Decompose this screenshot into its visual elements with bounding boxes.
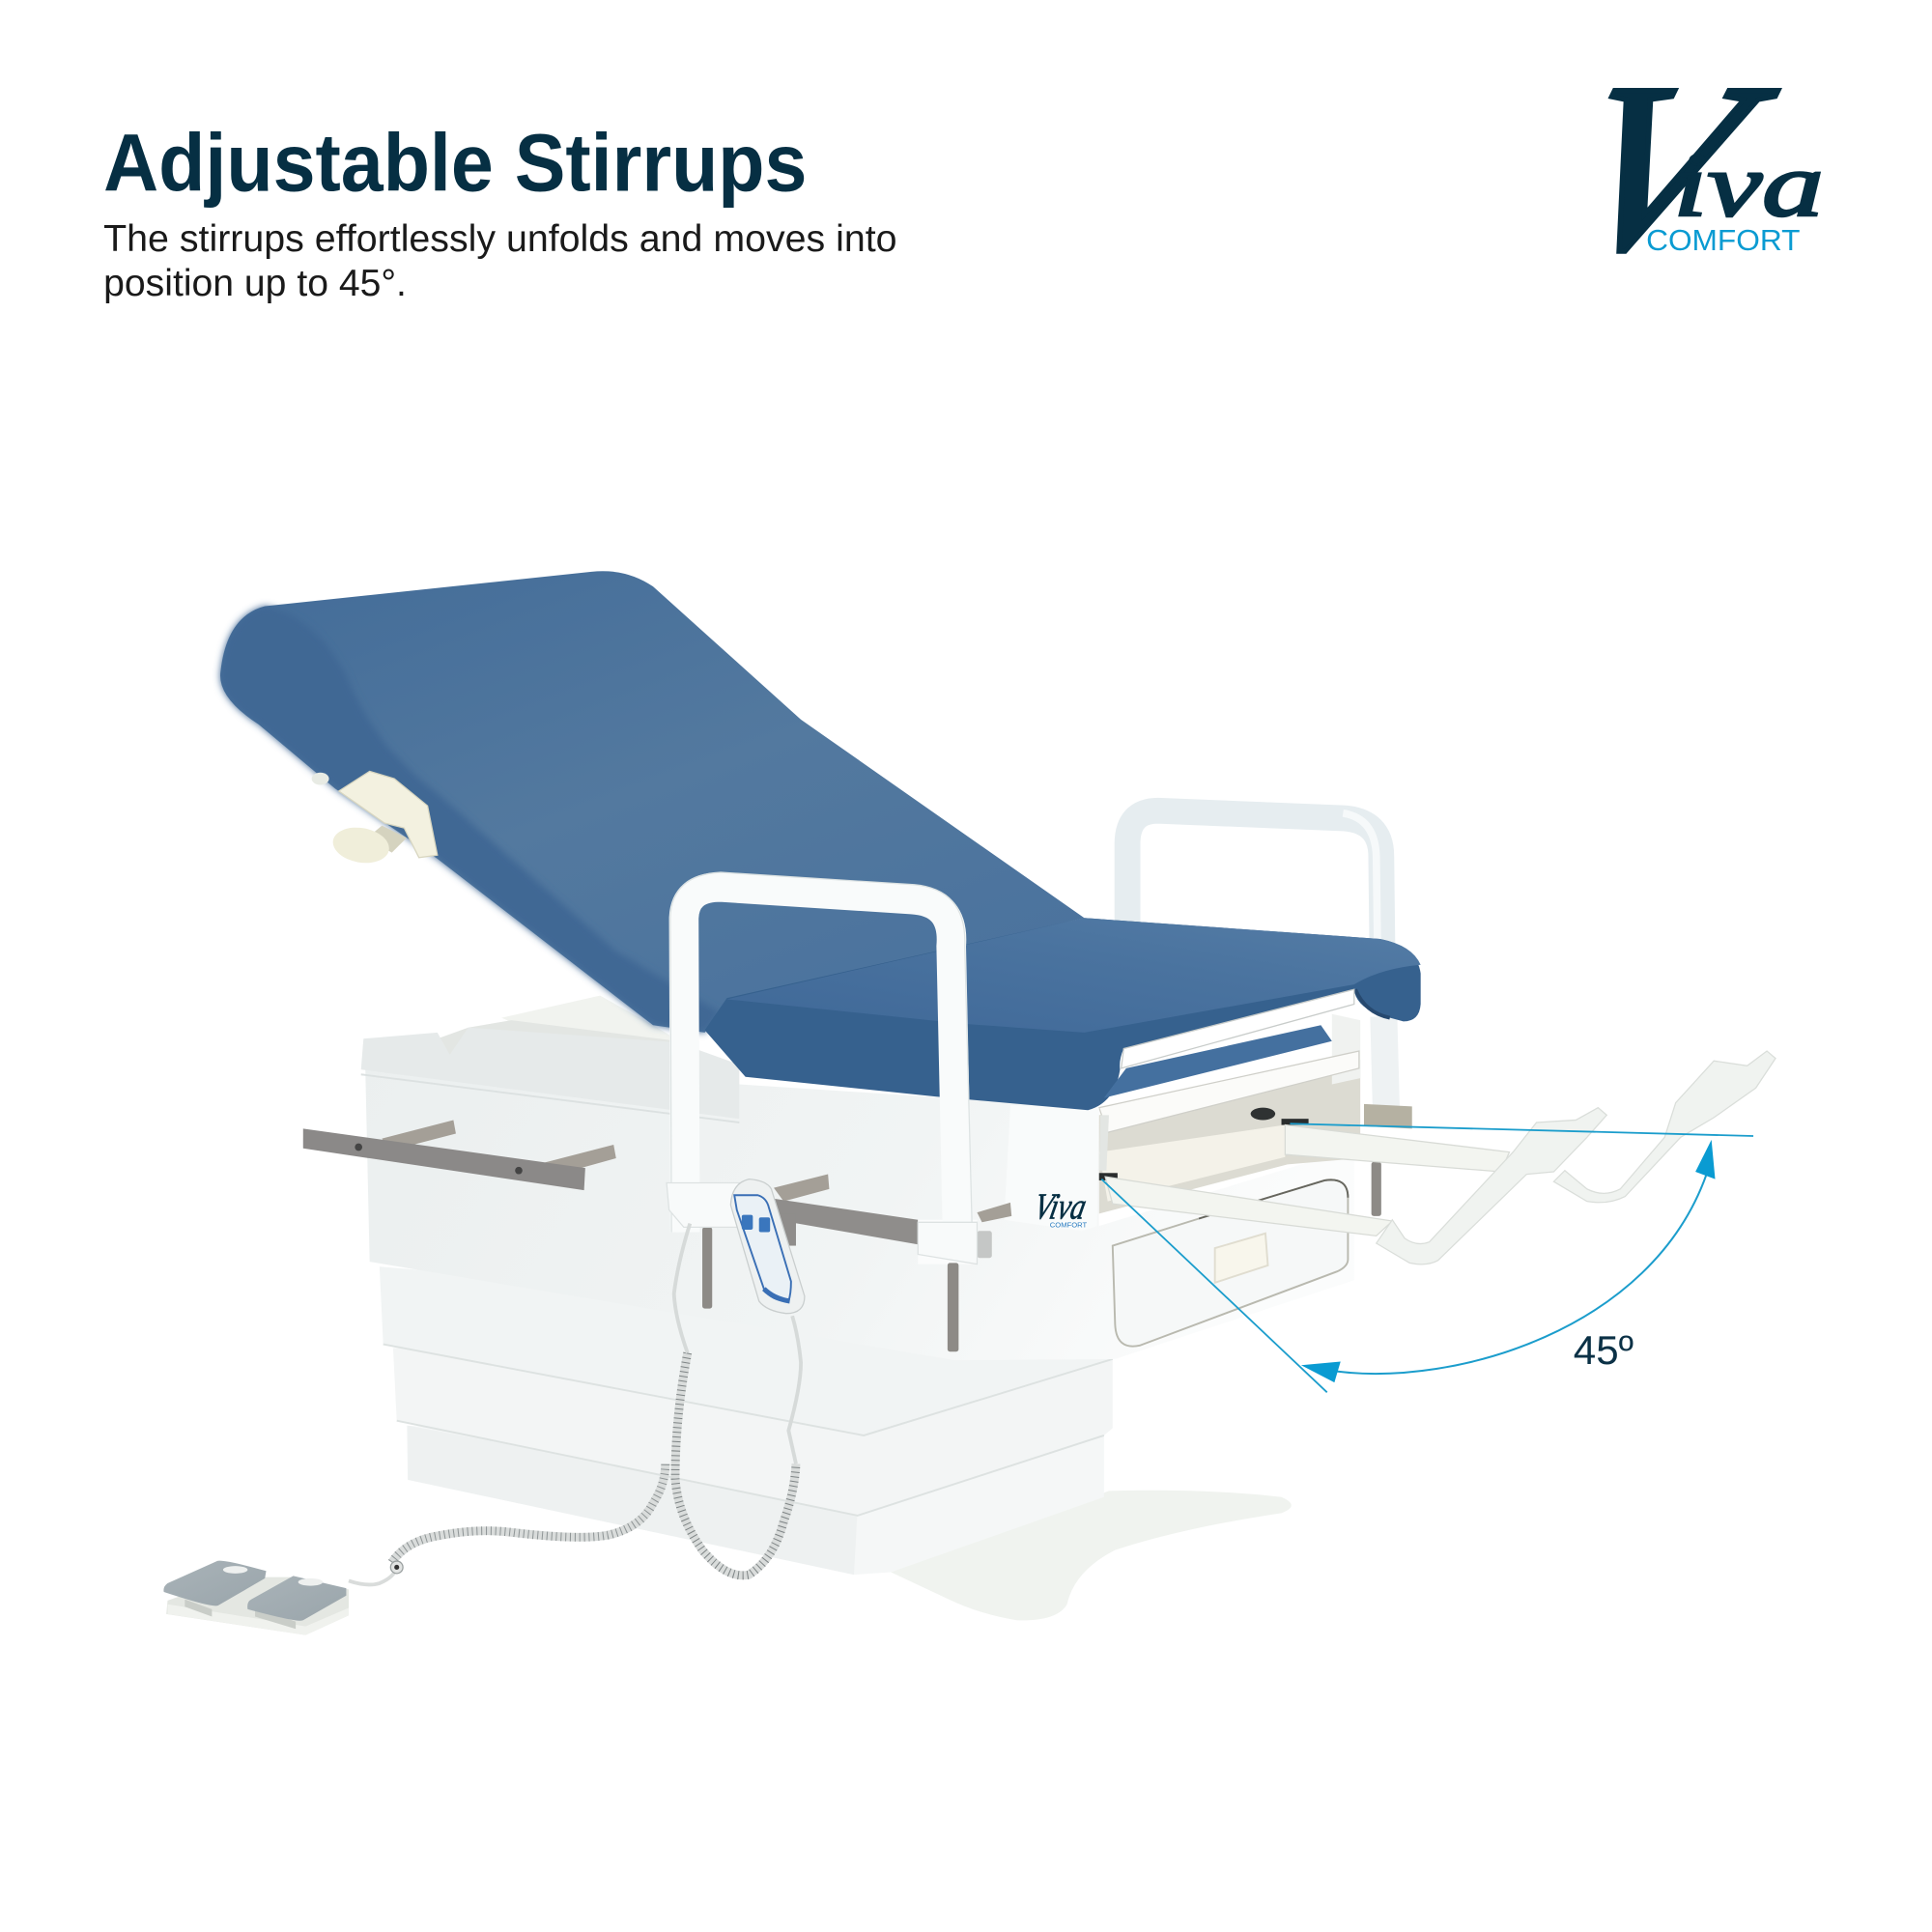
logo: Viva Comfort: iva — [1673, 135, 1824, 236]
under-seat mechanism — [1005, 1014, 1360, 1231]
foot plate — [891, 1491, 1292, 1620]
logo: Viva Comfort: COMFORT — [1646, 224, 1801, 257]
45 degree angle indicator — [1101, 1123, 1753, 1392]
base column tiers — [380, 1266, 1115, 1575]
hand remote control — [730, 1179, 805, 1314]
angle label: 45º — [1574, 1327, 1634, 1373]
backrest cushion — [220, 571, 1084, 1033]
hanging latch pins — [702, 1104, 1412, 1351]
front handrail — [670, 872, 972, 1233]
main cabinet — [361, 996, 1354, 1360]
side rail: front — [733, 1175, 1011, 1264]
stirrup: far — [1285, 1051, 1776, 1203]
coiled cables — [349, 1224, 801, 1584]
description text: The stirrups effortlessly unfolds and moves into — [103, 218, 897, 260]
side rail: left — [303, 1120, 616, 1190]
seat underside strip and lower cushion — [1104, 989, 1354, 1097]
foot pedal control — [163, 1561, 349, 1635]
description text — [103, 218, 897, 304]
rear handrail — [1127, 810, 1386, 1109]
description text: position up to 45°. — [103, 263, 407, 304]
backrest bracket and knob — [312, 771, 438, 867]
title: Adjustable Stirrups — [103, 118, 807, 209]
front handrail clamps — [667, 1182, 977, 1264]
seat cushion — [705, 918, 1421, 1110]
small Viva logo on cabinet: COMFORT — [1050, 1220, 1088, 1229]
small Viva logo on cabinet: Viva — [1031, 1185, 1091, 1227]
stirrup: near — [1105, 1108, 1606, 1264]
drawer — [1113, 1179, 1348, 1347]
logo: Viva Comfort: V — [1540, 34, 1798, 300]
